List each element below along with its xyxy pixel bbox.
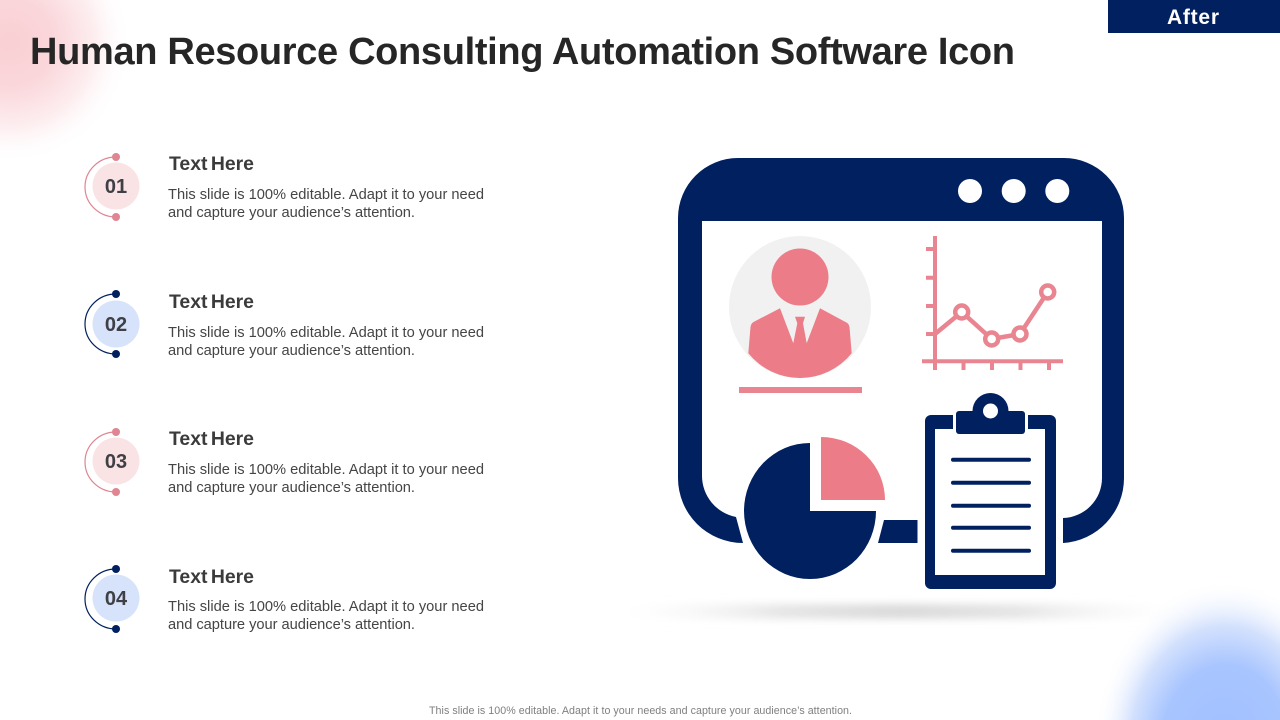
text 03: and capture your audience’s attention. bbox=[168, 480, 415, 496]
badge 04 bbox=[85, 565, 140, 633]
line chart bbox=[922, 236, 1063, 370]
badge 03: 03 bbox=[105, 451, 127, 473]
icon: software window illustration bbox=[678, 158, 1124, 589]
heading 02: Text Here bbox=[169, 291, 254, 313]
heading 04: Text Here bbox=[169, 566, 254, 588]
badge 02: 02 bbox=[105, 314, 127, 336]
text 02 bbox=[168, 325, 484, 359]
after tag bbox=[1108, 0, 1280, 33]
text 01: and capture your audience’s attention. bbox=[168, 205, 415, 221]
text 02: and capture your audience’s attention. bbox=[168, 343, 415, 359]
text 01: This slide is 100% editable. Adapt it to your need bbox=[168, 187, 484, 203]
text 01 bbox=[168, 187, 484, 221]
heading 03: Text Here bbox=[169, 428, 254, 450]
badge 01: 01 bbox=[105, 176, 127, 198]
window dots bbox=[958, 179, 1069, 203]
icon: clipboard bbox=[925, 393, 1056, 589]
text 04: and capture your audience’s attention. bbox=[168, 617, 415, 633]
list item 01 bbox=[85, 153, 484, 221]
ground shadow bbox=[600, 604, 1200, 619]
text 04: This slide is 100% editable. Adapt it to your need bbox=[168, 599, 484, 615]
footer note: This slide is 100% editable. Adapt it to your needs and capture your audience’s attention. bbox=[429, 705, 852, 717]
after tag: After bbox=[1167, 6, 1219, 29]
text 04 bbox=[168, 599, 484, 633]
pie chart bbox=[744, 437, 885, 579]
window frame bbox=[678, 158, 1124, 543]
text 02: This slide is 100% editable. Adapt it to your need bbox=[168, 325, 484, 341]
list item 03 bbox=[85, 428, 484, 496]
heading 01: Text Here bbox=[169, 153, 254, 175]
badge 04: 04 bbox=[105, 588, 128, 610]
list item 02 bbox=[85, 290, 484, 359]
title: Human Resource Consulting Automation Software Icon bbox=[30, 31, 1015, 73]
list item 04 bbox=[85, 565, 484, 633]
text 03 bbox=[168, 462, 484, 496]
badge 01 bbox=[85, 153, 140, 221]
badge 02 bbox=[85, 290, 140, 358]
text 03: This slide is 100% editable. Adapt it to your need bbox=[168, 462, 484, 478]
icon: user profile bbox=[729, 236, 871, 393]
badge 03 bbox=[85, 428, 140, 496]
